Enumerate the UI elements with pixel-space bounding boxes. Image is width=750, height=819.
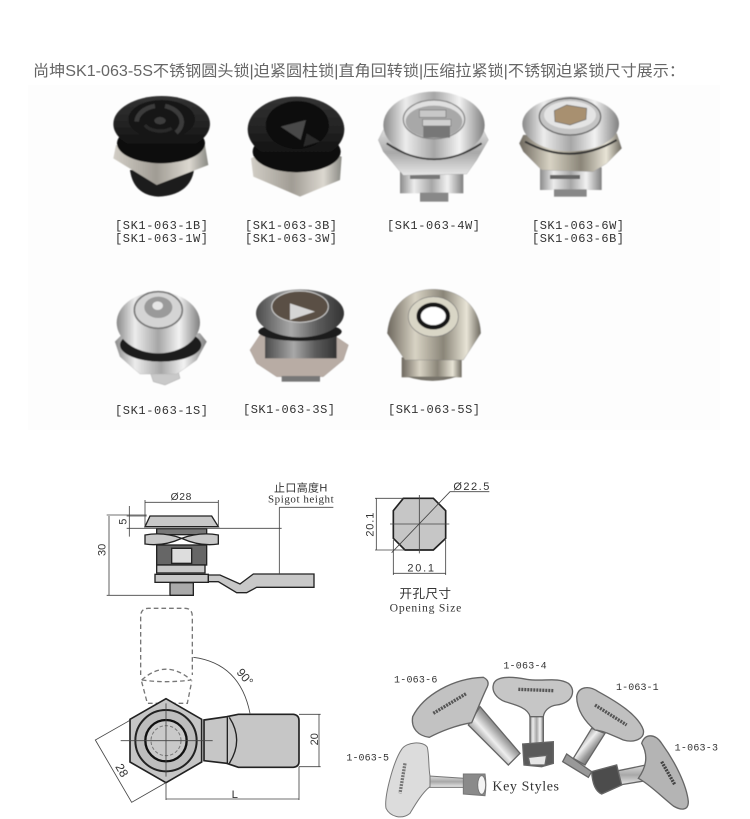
dimension labels: 90° xyxy=(234,666,256,689)
product: SK1-063-6W xyxy=(519,97,622,197)
label: SK1-063-6W / 6B: [SK1-063-6W] xyxy=(532,219,624,233)
products row one xyxy=(113,96,344,197)
label: SK1-063-3B / 3W: [SK1-063-3B] xyxy=(245,219,337,233)
label: SK1-063-3B / 3W: [SK1-063-3W] xyxy=(245,232,337,246)
diagram: side view with dimensions: Spigot height xyxy=(268,493,334,505)
product: SK1-063-3B xyxy=(248,97,344,197)
heading: key styles: Key Styles xyxy=(492,779,559,794)
diagram: opening size: 20.1 xyxy=(407,563,434,575)
diagram: side view with dimensions: 30 xyxy=(97,544,109,556)
key labels: 1-063-1 xyxy=(616,682,659,693)
dimension lines xyxy=(375,492,489,575)
key labels: 1-063-4 xyxy=(503,661,547,672)
dimension lines xyxy=(95,657,321,802)
product: SK1-063-1B xyxy=(113,96,210,197)
lock body xyxy=(145,516,314,595)
diagram: opening size xyxy=(364,481,489,614)
rotated handle (dashed) xyxy=(141,608,192,703)
diagram: side view with dimensions: 止口高度H xyxy=(274,480,327,494)
label: SK1-063-1S: [SK1-063-1S] xyxy=(115,404,208,418)
diagram: top view with rotation: L xyxy=(232,789,238,801)
label: SK1-063-3B / 3W xyxy=(245,219,337,246)
key labels: 1-063-6 xyxy=(394,674,437,685)
key styles photo xyxy=(346,661,718,817)
diagram: top view with rotation xyxy=(95,608,321,802)
product: SK1-063-1S xyxy=(115,292,207,385)
product: SK1-063-3S xyxy=(250,289,348,382)
diagram: side view with dimensions: 5 xyxy=(118,519,130,525)
hex nut xyxy=(130,699,202,783)
labels row two xyxy=(115,403,480,418)
labels row one xyxy=(115,219,624,246)
label: SK1-063-6W / 6B xyxy=(532,219,624,246)
key 1-063-6 xyxy=(412,677,520,765)
label: SK1-063-4W: [SK1-063-4W] xyxy=(387,219,480,233)
key 1-063-1 xyxy=(563,688,644,777)
key 1-063-4 xyxy=(493,677,573,767)
opening shape xyxy=(393,498,446,550)
product: SK1-063-4W xyxy=(378,92,488,202)
diagram: opening size: 开孔尺寸 xyxy=(399,587,451,601)
diagram: opening size: 20.1 xyxy=(364,513,376,537)
title: 尚坤SK1-063-5S不锈钢圆头锁|迫紧圆柱锁|直角回转锁|压缩拉紧锁|不锈钢迫紧锁尺寸展示： xyxy=(33,62,685,80)
key 1-063-5 xyxy=(386,743,486,817)
label: SK1-063-1B / 1W: [SK1-063-1W] xyxy=(115,232,208,246)
dimension labels: Ø22.5 xyxy=(453,481,489,493)
key labels: 1-063-5 xyxy=(346,753,389,764)
diagram: top view with rotation: 28 xyxy=(112,761,131,780)
dimension labels: Ø28 xyxy=(171,492,192,503)
product: SK1-063-5S xyxy=(387,289,481,381)
label: SK1-063-3S: [SK1-063-3S] xyxy=(243,403,335,417)
key labels: 1-063-3 xyxy=(675,742,718,753)
products row two xyxy=(115,289,481,385)
diagram: top view with rotation: 20 xyxy=(309,733,321,745)
dimension lines xyxy=(107,500,333,595)
label: SK1-063-1B / 1W xyxy=(115,219,208,246)
photo panel background xyxy=(28,85,720,430)
key 1-063-3 xyxy=(592,736,688,809)
diagram: opening size: Opening Size xyxy=(390,601,461,614)
diagram: side view with dimensions xyxy=(97,480,334,595)
handle xyxy=(204,714,299,767)
key labels xyxy=(346,661,718,764)
label: SK1-063-5S: [SK1-063-5S] xyxy=(388,403,480,417)
label: SK1-063-1B / 1W: [SK1-063-1B] xyxy=(115,219,208,233)
label: SK1-063-6W / 6B: [SK1-063-6B] xyxy=(532,232,624,246)
